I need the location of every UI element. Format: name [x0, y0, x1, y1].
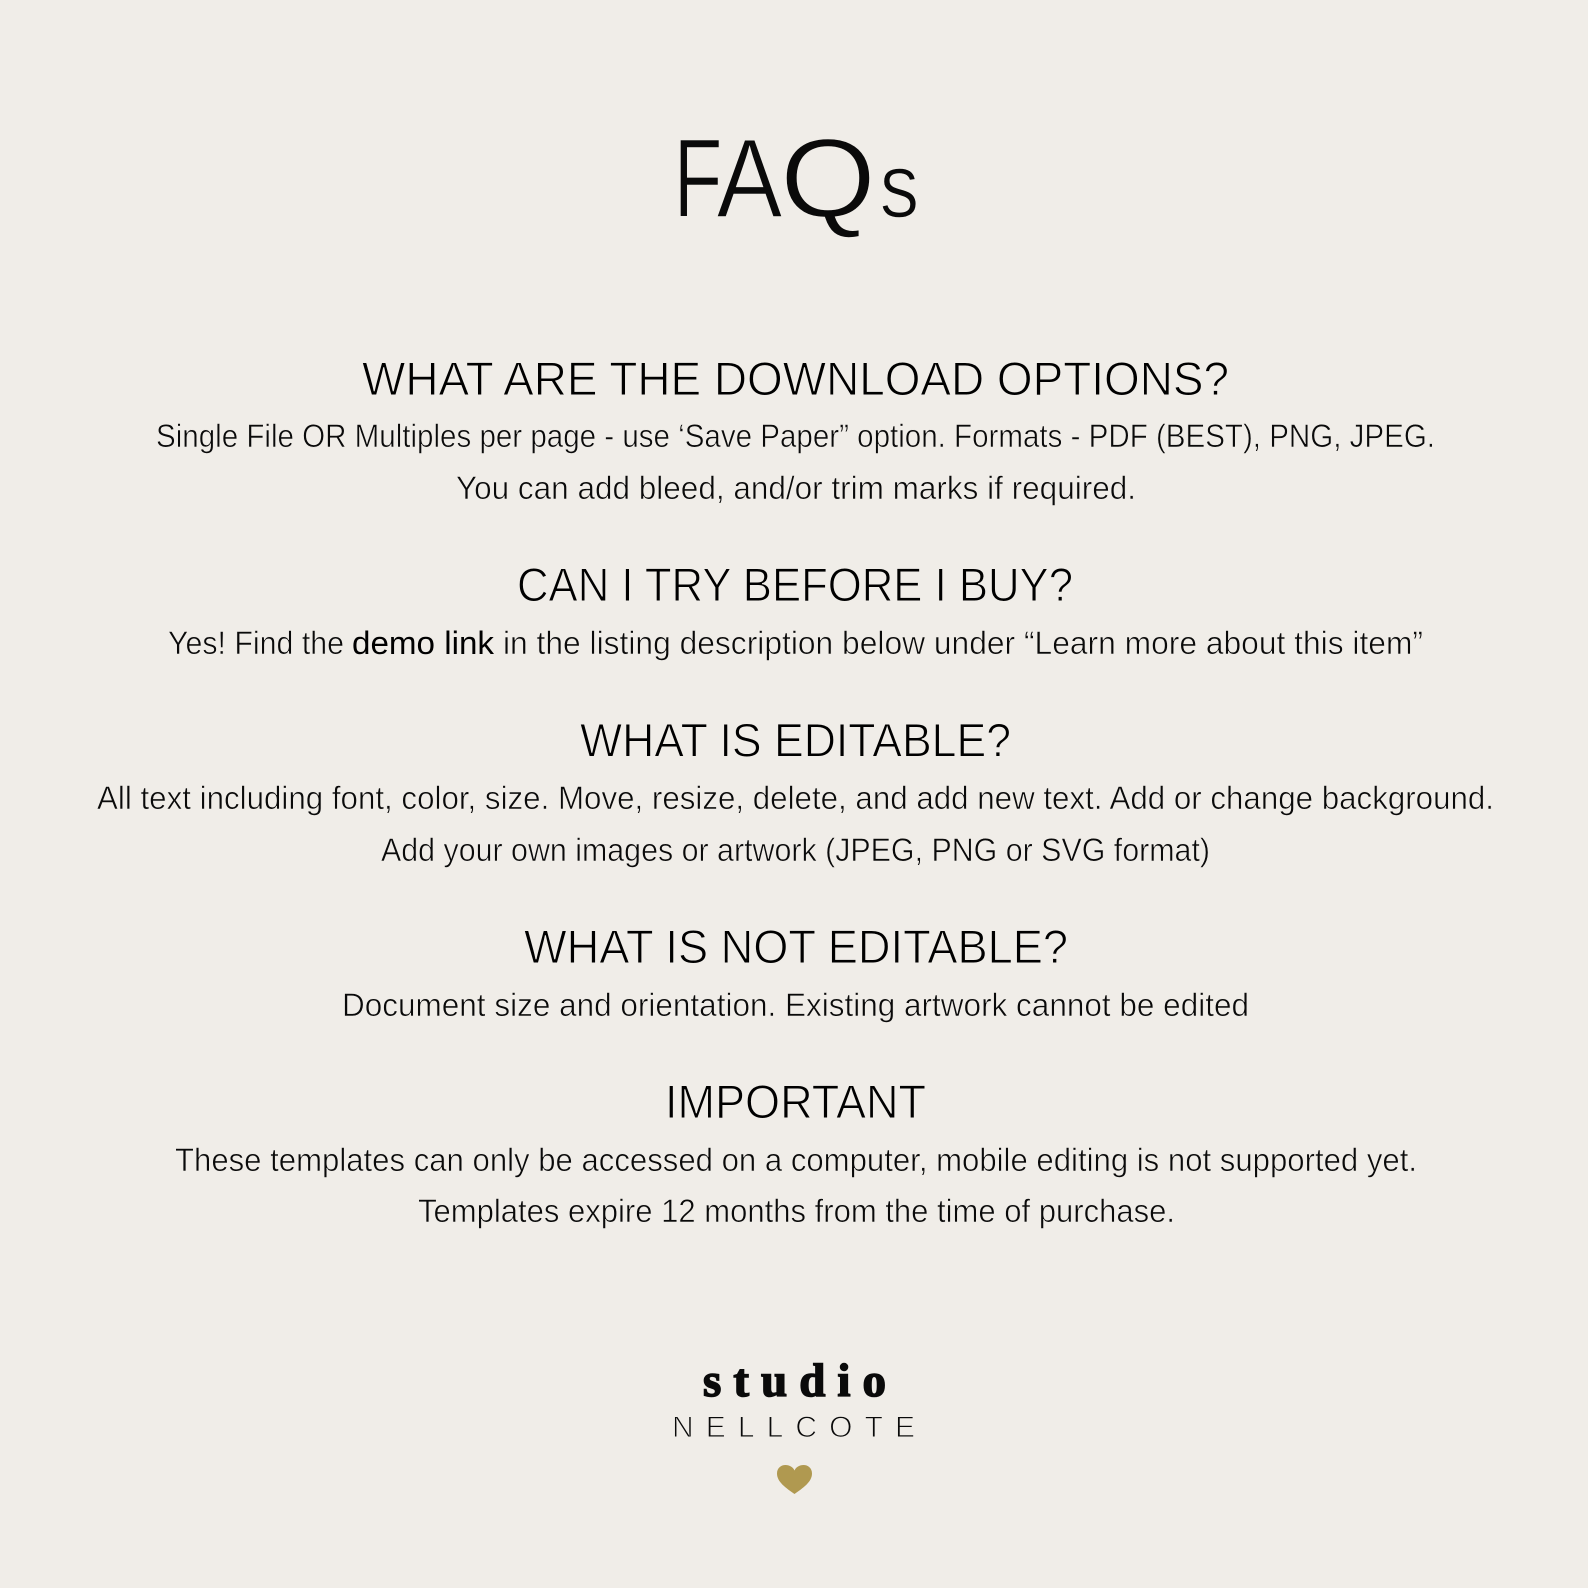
logo: studio nellcote	[672, 1355, 915, 1494]
panel: download options	[156, 352, 1435, 506]
heading: what is not editable: WHAT IS NOT EDITABLE?	[524, 920, 1068, 973]
heading: download options: WHAT ARE THE DOWNLOAD OPTIONS?	[362, 352, 1229, 405]
text block: demo link answer: Yes! Find the	[168, 625, 344, 661]
title: Q	[780, 116, 876, 241]
text block: demo link answer: in the listing description below under “Learn more about this item”	[503, 625, 1423, 661]
panel: what is not editable	[342, 920, 1249, 1023]
title	[674, 116, 919, 241]
panel: what is editable	[97, 714, 1494, 868]
text block: important answer	[175, 1142, 1417, 1229]
text block: editable answer: All text including font, color, size. Move, resize, delete, and add new text. Add or change background.	[97, 780, 1494, 816]
title: F	[674, 116, 722, 241]
panel: important	[175, 1075, 1417, 1229]
heading: what is editable: WHAT IS EDITABLE?	[580, 714, 1011, 766]
logo word: nellcote: NELLCOTE	[672, 1411, 915, 1444]
icon: gold heart	[777, 1465, 812, 1494]
text block: editable answer: Add your own images or artwork (JPEG, PNG or SVG format)	[381, 832, 1210, 868]
text block: editable answer	[97, 780, 1494, 868]
heading: try before buying: CAN I TRY BEFORE I BUY?	[517, 558, 1073, 611]
title: A	[716, 116, 783, 241]
text block: important answer: These templates can only be accessed on a computer, mobile editing is not supported yet.	[175, 1142, 1417, 1178]
logo word: studio: studio	[703, 1355, 886, 1407]
heading: important: IMPORTANT	[665, 1075, 926, 1128]
panel: try before buying	[168, 558, 1423, 661]
text block: download options answer: You can add bleed, and/or trim marks if required.	[456, 470, 1136, 506]
text block: not editable answer: Document size and orientation. Existing artwork cannot be edited	[342, 987, 1249, 1023]
text block: demo link answer: demo link	[352, 625, 495, 661]
text block: important answer: Templates expire 12 months from the time of purchase.	[418, 1193, 1175, 1229]
text block: download options answer	[156, 418, 1435, 506]
text block: download options answer: Single File OR Multiples per page - use ‘Save Paper” option. Formats - PDF (BEST), PNG, JPEG.	[156, 418, 1435, 454]
title: s	[880, 135, 919, 237]
